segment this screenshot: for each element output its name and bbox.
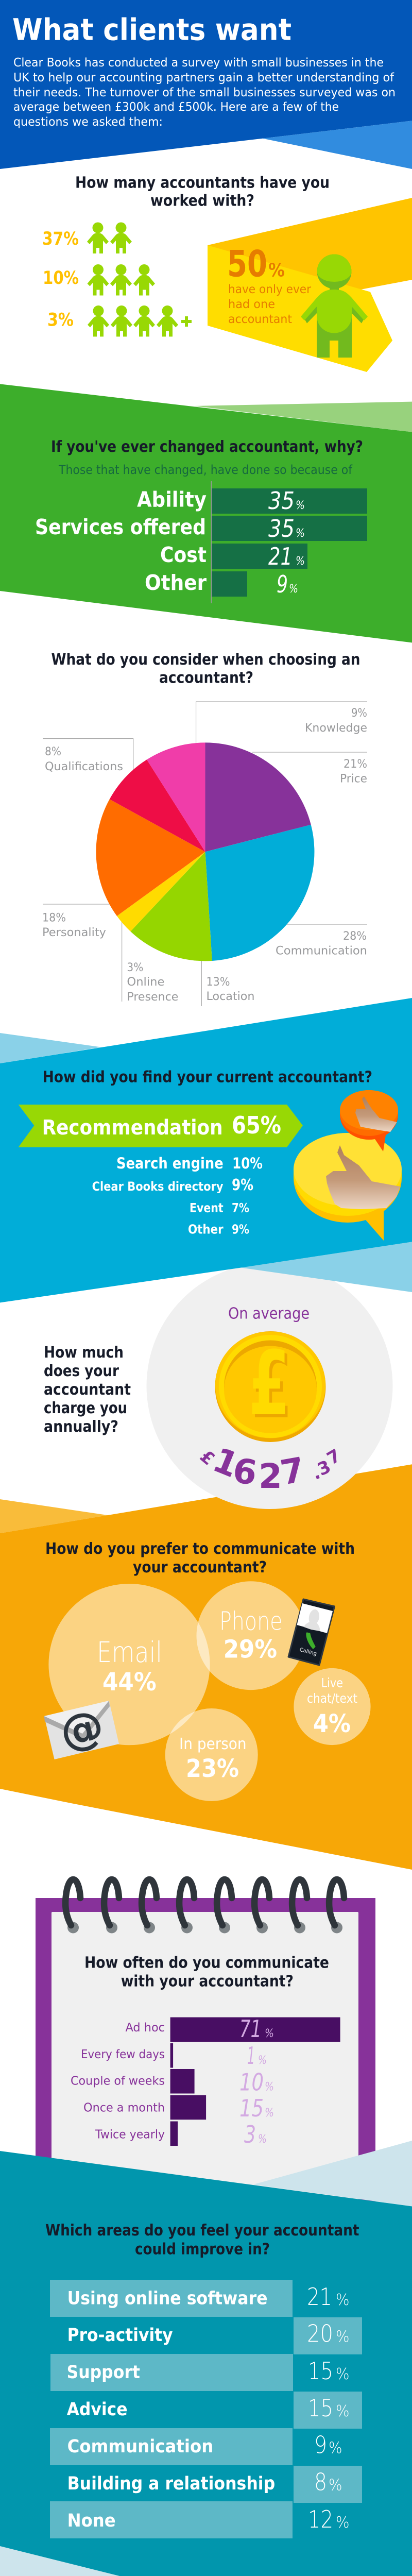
pie labels: choosing an accountant: Location — [206, 990, 254, 1003]
heading: which areas — [45, 2222, 359, 2258]
table: areas to improve: 12 — [308, 2505, 333, 2533]
pie labels: choosing an accountant — [42, 706, 367, 1004]
bubble: live chat 4% — [294, 1668, 371, 1745]
pie labels: choosing an accountant: Personality — [42, 926, 106, 939]
heading: which areas: Which areas do you feel your accountant — [45, 2222, 359, 2240]
bar chart: frequency: Couple of weeks — [71, 2073, 165, 2088]
list: other sources: 7% — [232, 1200, 249, 1215]
bubble: in person 23%: In person — [179, 1735, 247, 1753]
50% callout: had one — [228, 298, 275, 311]
bar chart: frequency: 10 — [239, 2069, 264, 2096]
50% callout: accountant — [228, 313, 292, 326]
list: other sources: Clear Books directory — [92, 1179, 224, 1194]
table: areas to improve: Building a relationship — [67, 2473, 275, 2494]
banner: recommendation 65%: Recommendation — [42, 1116, 223, 1140]
table: areas to improve: Using online software — [67, 2288, 268, 2309]
table: areas to improve — [50, 2280, 362, 2538]
table: areas to improve: % — [329, 2439, 342, 2458]
heading: how much annually — [44, 1344, 131, 1436]
header background — [0, 0, 412, 169]
bar chart: reasons: Ability — [137, 487, 207, 512]
heading: how much annually: does your — [44, 1362, 119, 1380]
heading: how many accountants: How many accountants have you — [75, 174, 330, 192]
table: areas to improve: 9 — [314, 2431, 327, 2459]
bar chart: reasons: % — [296, 499, 305, 512]
bar chart: reasons: % — [289, 583, 298, 596]
bar chart: frequency: Every few days — [81, 2047, 165, 2061]
heading: what do you consider — [52, 651, 360, 687]
bubble: email 44%: 44% — [102, 1668, 157, 1697]
icon: phone — [288, 1599, 335, 1665]
list: other sources: Search engine — [116, 1155, 224, 1172]
list: other sources: 10% — [232, 1155, 263, 1172]
icon: pound coin: £ — [251, 1335, 293, 1438]
pie labels: choosing an accountant: 13% — [206, 975, 230, 989]
teal section background — [0, 2141, 412, 2576]
icon: email envelope: @ — [55, 1699, 109, 1759]
50% callout: have only ever — [228, 283, 312, 296]
icon: orange speech bubble with thumb up — [340, 1090, 398, 1151]
bar chart: reasons — [35, 481, 367, 603]
bar chart: frequency: % — [265, 2027, 274, 2040]
table: areas to improve: 21 — [307, 2283, 332, 2311]
heading: how much annually: How much — [44, 1344, 124, 1362]
bar chart: reasons: 35 — [268, 515, 295, 543]
table: areas to improve: 20 — [307, 2320, 333, 2348]
bubble: phone 29%: Phone — [219, 1607, 282, 1636]
table: areas to improve: Advice — [67, 2399, 128, 2420]
orange section background — [0, 1464, 412, 1870]
heading: how many accountants — [75, 174, 330, 210]
pie labels: choosing an accountant: Price — [340, 772, 367, 786]
bar chart: reasons: Cost — [160, 543, 207, 567]
bar chart: frequency: Ad hoc — [126, 2020, 165, 2035]
cyan section background — [0, 998, 412, 1302]
heading: how much annually: annually? — [44, 1418, 118, 1436]
bar chart: reasons: Other — [145, 570, 207, 595]
table: areas to improve: 15 — [308, 2357, 333, 2385]
bar chart: frequency — [71, 2015, 340, 2148]
icon: pound coin: £ — [249, 1332, 290, 1435]
table: areas to improve: % — [336, 2365, 350, 2383]
pie labels: choosing an accountant: 18% — [42, 911, 66, 924]
average amount on arc: 7 — [323, 1445, 345, 1469]
average amount on arc — [196, 1440, 345, 1496]
pie labels: choosing an accountant: 3% — [127, 961, 143, 974]
heading: how do you prefer — [45, 1540, 355, 1577]
pie labels: choosing an accountant: 28% — [343, 929, 367, 943]
average amount on arc: . — [310, 1463, 323, 1484]
pie labels: choosing an accountant: 21% — [344, 757, 367, 771]
row: 3% four plus accountants: 3% — [47, 310, 74, 331]
title: What clients want — [12, 12, 291, 47]
list: other sources: Event — [190, 1200, 224, 1215]
table: areas to improve: 8 — [314, 2468, 327, 2496]
intro text block: their needs. The turnover of the small businesses surveyed was on — [13, 86, 396, 99]
bar chart: reasons: % — [296, 555, 305, 568]
icon: phone: Calling — [299, 1647, 317, 1657]
bar chart: reasons: 21 — [268, 543, 293, 570]
average amount on arc: 1 — [208, 1440, 244, 1485]
table: areas to improve: % — [336, 2514, 350, 2532]
list: other sources: Other — [188, 1222, 224, 1237]
table: areas to improve: % — [336, 2291, 350, 2309]
row: 37% two accountants: 37% — [42, 229, 79, 249]
table: areas to improve: 15 — [308, 2394, 333, 2422]
list: other sources: 9% — [232, 1176, 253, 1194]
row: 10% three accountants — [43, 264, 155, 296]
row: 3% four plus accountants — [47, 306, 192, 336]
pie labels: choosing an accountant: Knowledge — [305, 721, 367, 735]
bar chart: frequency: Once a month — [83, 2100, 165, 2115]
bubble: in person 23%: 23% — [186, 1754, 239, 1783]
bar chart: frequency: % — [265, 2081, 274, 2094]
bubble: in person 23% — [165, 1708, 258, 1801]
heading: why changed: If you've ever changed accountant, why? — [51, 438, 363, 456]
bubble: live chat 4%: chat/text — [307, 1691, 357, 1706]
table: areas to improve: % — [336, 2328, 350, 2346]
bar chart: reasons: Services offered — [35, 515, 206, 539]
bar chart: reasons: 35 — [268, 487, 295, 515]
intro text block: questions we asked them: — [13, 115, 163, 129]
pie chart leader lines — [43, 702, 367, 1006]
heading: how many accountants: worked with? — [150, 192, 254, 210]
icon: pound coin — [215, 1331, 325, 1442]
table: areas to improve: Communication — [67, 2436, 213, 2457]
heading: how often: with your accountant? — [121, 1973, 294, 1991]
intro text block: Clear Books has conducted a survey with small businesses in the — [13, 56, 384, 70]
bar chart: frequency: 15 — [239, 2094, 264, 2122]
heading: how did you find: How did you find your current accountant? — [43, 1068, 372, 1086]
intro text block: UK to help our accounting partners gain a better understanding of — [13, 71, 394, 84]
average amount on arc: 2 — [259, 1456, 282, 1496]
bar chart: frequency: % — [258, 2054, 267, 2067]
icon: yellow speech bubble with thumb up — [294, 1133, 402, 1241]
50% callout: % — [268, 260, 285, 281]
bubble: email 44% — [48, 1584, 210, 1745]
bar chart: reasons: % — [296, 527, 305, 540]
pie chart: choosing an accountant — [96, 742, 314, 961]
bar chart: reasons: 9 — [277, 570, 288, 598]
pie labels: choosing an accountant: Communication — [276, 944, 367, 958]
heading: how often — [84, 1954, 329, 1991]
table: areas to improve: % — [336, 2402, 350, 2420]
bar chart: frequency: % — [258, 2133, 267, 2146]
heading: how often: How often do you communicate — [84, 1954, 329, 1972]
icon: notebook spiral rings — [65, 1879, 344, 1933]
heading: how do you prefer: your accountant? — [133, 1558, 267, 1577]
panel: notebook — [36, 1898, 375, 2221]
heading: what do you consider: accountant? — [159, 669, 253, 687]
banner: recommendation 65%: 65% — [232, 1111, 281, 1139]
row: 37% two accountants — [42, 223, 132, 253]
50% callout — [227, 243, 312, 326]
bar chart: frequency: 1 — [247, 2042, 255, 2070]
heading: which areas: could improve in? — [135, 2240, 270, 2258]
pie labels: choosing an accountant: 9% — [351, 706, 367, 720]
average amount on arc: £ — [196, 1446, 218, 1470]
heading: what do you consider: What do you consider when choosing an — [52, 651, 360, 669]
grey circle behind coin — [146, 1263, 392, 1509]
intro text block — [13, 56, 396, 129]
average amount on arc: 6 — [230, 1450, 260, 1493]
bubble: phone 29%: 29% — [224, 1635, 277, 1664]
bar chart: frequency: 3 — [244, 2121, 256, 2148]
banner: recommendation 65% — [19, 1105, 303, 1147]
row: 10% three accountants: 10% — [43, 268, 79, 289]
heading: how much annually: charge you — [44, 1399, 127, 1417]
spotlight shape — [208, 198, 412, 372]
pie labels: choosing an accountant: 8% — [45, 745, 61, 758]
panel: why changed accountant — [0, 384, 412, 642]
pie labels: choosing an accountant: Online — [127, 975, 164, 989]
bubble: live chat 4%: 4% — [313, 1709, 351, 1738]
pie labels: choosing an accountant: Qualifications — [45, 760, 123, 773]
intro text block: average between £300k and £500k. Here are a few of the — [13, 100, 339, 114]
table: areas to improve: % — [329, 2476, 342, 2495]
bar chart: frequency: Twice yearly — [95, 2127, 165, 2142]
list: other sources: 9% — [232, 1222, 249, 1237]
bubble: live chat 4%: Live — [321, 1675, 343, 1690]
average amount on arc: 7 — [278, 1450, 307, 1493]
average amount on arc: 3 — [315, 1456, 334, 1480]
heading: how much annually: accountant — [44, 1381, 131, 1399]
pie labels: choosing an accountant: Presence — [127, 990, 178, 1004]
subheading: Those that have changed, have done so because of — [58, 463, 353, 477]
table: areas to improve: None — [67, 2511, 116, 2531]
on average label: On average — [228, 1305, 310, 1323]
bar chart: frequency: 71 — [239, 2015, 262, 2043]
bubble: phone 29% — [197, 1581, 305, 1690]
bar chart: frequency: % — [265, 2107, 274, 2120]
list: other sources — [92, 1155, 263, 1237]
bubble: email 44%: Email — [97, 1636, 162, 1669]
50% callout: 50 — [227, 243, 267, 285]
icon: big person — [301, 255, 368, 358]
heading: how do you prefer: How do you prefer to communicate with — [45, 1540, 355, 1558]
table: areas to improve: Pro-activity — [67, 2325, 173, 2346]
table: areas to improve: Support — [67, 2362, 140, 2383]
